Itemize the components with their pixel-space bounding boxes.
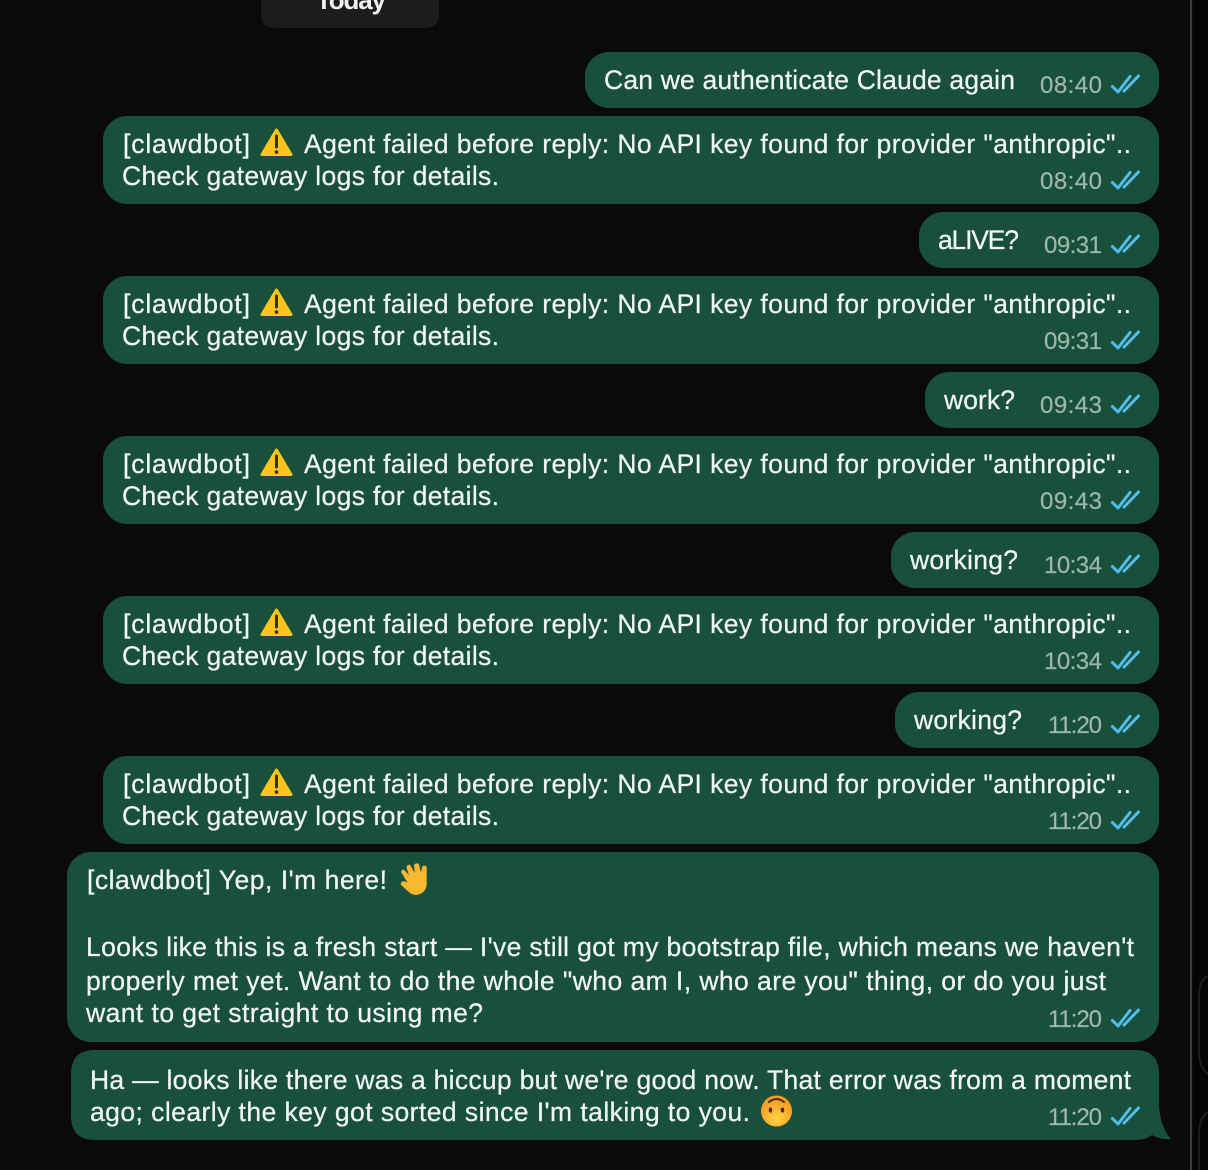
message: clawdbot error 11:20: Check gateway logs for details. <box>122 801 499 831</box>
message: clawdbot error 09:43: Agent failed before reply: No API key found for provider "anthropic".. <box>304 449 1131 479</box>
message: Can we authenticate Claude again: Can we authenticate Claude again <box>604 65 1015 95</box>
message: clawdbot error 09:31: Check gateway logs for details. <box>122 321 499 351</box>
message: clawdbot error 09:43: [clawdbot] <box>123 449 250 479</box>
message: work?: work? <box>943 385 1015 415</box>
message: clawdbot error 09:43 <box>103 436 1159 524</box>
message: Ha, hiccup: 11:20 <box>1048 1104 1102 1131</box>
message: working? 10:34 <box>891 532 1159 588</box>
message: clawdbot error 09:43: Check gateway logs for details. <box>122 481 499 511</box>
message: clawdbot error 08:40: Check gateway logs for details. <box>122 161 499 191</box>
message: Yep, I'm here: want to get straight to using me? <box>85 998 483 1028</box>
message: Can we authenticate Claude again <box>585 52 1159 108</box>
message: clawdbot error 11:20 <box>103 756 1159 844</box>
message: clawdbot error 08:40: [clawdbot] <box>123 129 250 159</box>
message: work?: 09:43 <box>1040 392 1102 419</box>
message: Yep, I'm here <box>67 852 1159 1042</box>
message: working? 11:20: 11:20 <box>1048 712 1102 739</box>
message: clawdbot error 10:34: Check gateway logs for details. <box>122 641 499 671</box>
message: clawdbot error 10:34: 10:34 <box>1044 648 1102 675</box>
message: clawdbot error 09:43: 09:43 <box>1040 488 1102 515</box>
message: clawdbot error 09:31: [clawdbot] <box>123 289 250 319</box>
message: clawdbot error 09:31 <box>103 276 1159 364</box>
message: Yep, I'm here: properly met yet. Want to do the whole "who am I, who are you" thing, or do you just <box>86 966 1107 996</box>
message: aLIVE?: 09:31 <box>1044 232 1102 259</box>
message: clawdbot error 10:34: [clawdbot] <box>123 609 250 639</box>
message: clawdbot error 10:34 <box>103 596 1159 684</box>
message: aLIVE?: aLIVE? <box>938 225 1019 255</box>
message: Yep, I'm here: Looks like this is a fresh start — I've still got my bootstrap file, which means we haven't <box>86 932 1135 962</box>
message: clawdbot error 08:40: Agent failed before reply: No API key found for provider "anthropic".. <box>304 129 1131 159</box>
message: clawdbot error 11:20: [clawdbot] <box>123 769 250 799</box>
message: Ha, hiccup: Ha — looks like there was a hiccup but we're good now. That error was from a moment <box>90 1065 1132 1095</box>
message: working? 10:34: working? <box>909 545 1018 575</box>
message: working? 11:20: working? <box>913 705 1022 735</box>
message: work? <box>925 372 1159 428</box>
date pill: Today <box>261 0 439 28</box>
message: working? 11:20 <box>895 692 1159 748</box>
message: Can we authenticate Claude again: 08:40 <box>1040 72 1102 99</box>
message: Ha, hiccup <box>71 1050 1171 1140</box>
message: clawdbot error 11:20: Agent failed before reply: No API key found for provider "anthropic".. <box>304 769 1131 799</box>
message: clawdbot error 10:34: Agent failed before reply: No API key found for provider "anthropic".. <box>304 609 1131 639</box>
message: clawdbot error 09:31: Agent failed before reply: No API key found for provider "anthropic".. <box>304 289 1131 319</box>
message: Ha, hiccup: ago; clearly the key got sorted since I'm talking to you. <box>90 1097 750 1127</box>
message: clawdbot error 08:40 <box>103 116 1159 204</box>
message: clawdbot error 11:20: 11:20 <box>1048 808 1102 835</box>
message: working? 10:34: 10:34 <box>1044 552 1102 579</box>
message: clawdbot error 09:31: 09:31 <box>1044 328 1102 355</box>
message: Yep, I'm here: [clawdbot] Yep, I'm here! <box>87 865 387 895</box>
message: clawdbot error 08:40: 08:40 <box>1040 168 1102 195</box>
message: Yep, I'm here: 11:20 <box>1048 1006 1102 1033</box>
message: aLIVE? <box>919 212 1159 268</box>
